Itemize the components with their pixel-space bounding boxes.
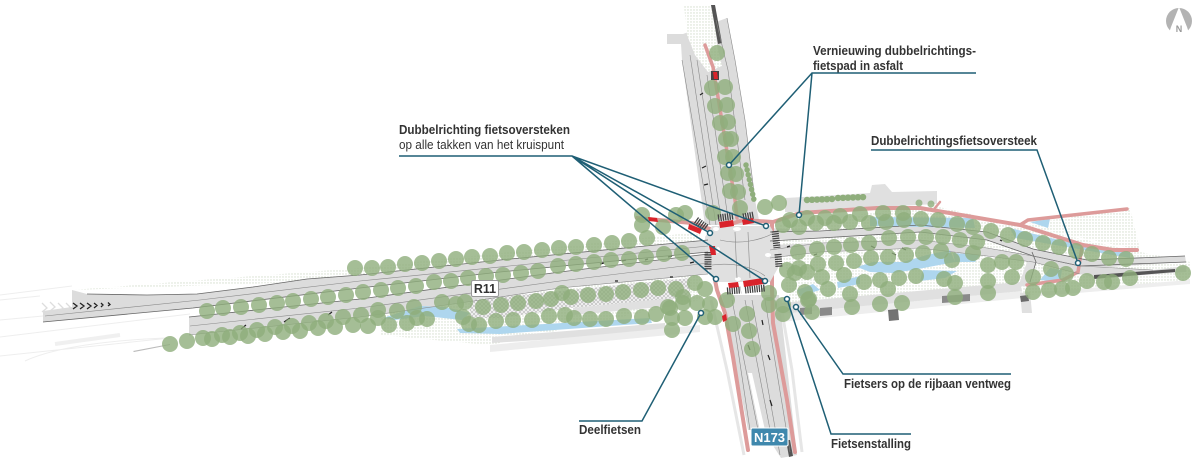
callout: Fietsers op de rijbaan ventweg: Fietsers op de rijbaan ventweg (844, 377, 1011, 391)
west upper carriageway (43, 240, 708, 322)
chevrons (42, 302, 110, 312)
crossings: hatched strips and red conflict areas (648, 71, 779, 322)
callout: Fietsenstalling (784, 296, 911, 451)
east roads (770, 225, 1186, 268)
callout: Fietsenstalling: Fietsenstalling (831, 437, 911, 451)
hedges (746, 165, 866, 200)
callout: Fietsers op de rijbaan ventweg (794, 304, 1011, 391)
cycle paths (637, 45, 1137, 452)
water east (797, 217, 1130, 296)
trees (162, 45, 1191, 357)
callout: Dubbelrichtingsfietsoversteek (871, 134, 1080, 266)
callout: Dubbelrichting fietsoversteken: Dubbelrichting fietsoversteken (399, 123, 570, 137)
faded road continuation in the west (0, 286, 190, 361)
road label: R11: R11 (474, 282, 496, 296)
callout: Dubbelrichting fietsoversteken: op alle takken van het kruispunt (399, 138, 564, 152)
road arrows (241, 93, 1002, 406)
road label: N173: N173 (754, 430, 785, 445)
road label: N173 (751, 428, 788, 446)
north branch road (667, 18, 760, 225)
callout: Vernieuwing dubbelrichtingsfietspad in asfalt (726, 44, 976, 218)
callout: Deelfietsen: Deelfietsen (579, 423, 641, 437)
callout: Deelfietsen (579, 310, 704, 437)
south branch road (722, 295, 797, 458)
west lower carriageway (189, 254, 708, 335)
callout: Vernieuwing dubbelrichtingsfietspad in asfalt: Vernieuwing dubbelrichtings- (813, 44, 976, 58)
callout: Dubbelrichting fietsoversteken (399, 123, 768, 284)
intersection (705, 226, 778, 282)
hatched verges (72, 232, 700, 345)
water west (383, 306, 652, 334)
south-west service roads (470, 278, 690, 318)
icon: north arrow (1166, 7, 1192, 36)
east top service road (785, 184, 937, 212)
east bottom service road (780, 282, 1022, 314)
callout: Dubbelrichtingsfietsoversteek: Dubbelrichtingsfietsoversteek (871, 134, 1037, 148)
callout: Vernieuwing dubbelrichtingsfietspad in asfalt: fietspad in asfalt (813, 59, 904, 73)
icon: north arrow: N (1176, 24, 1182, 34)
